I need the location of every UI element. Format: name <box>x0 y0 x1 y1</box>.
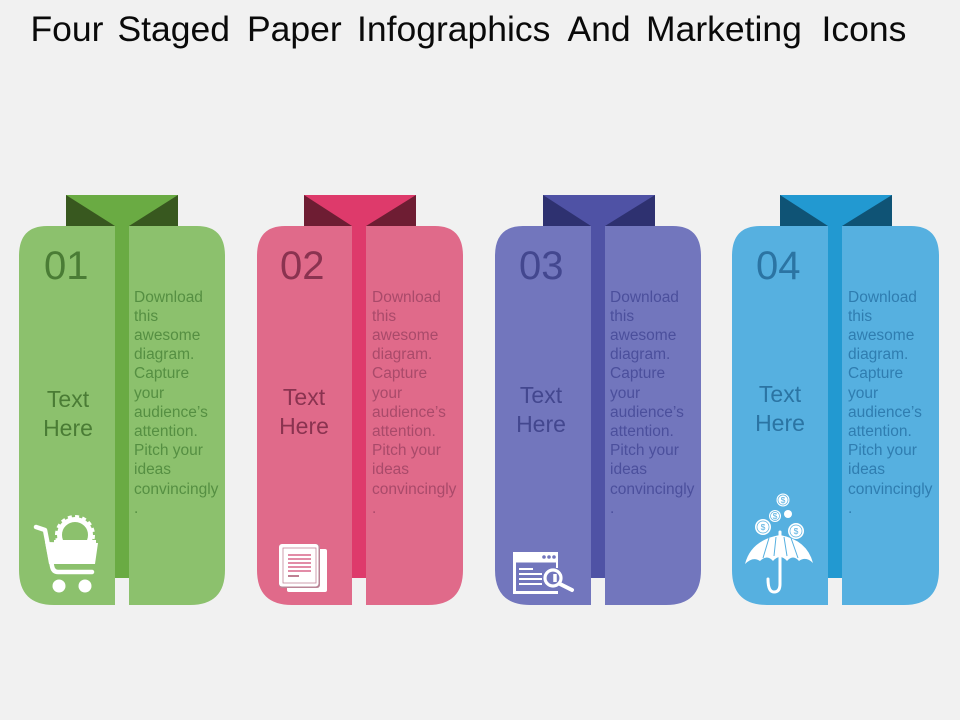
body text: Pitch your <box>134 442 203 459</box>
body text <box>134 289 219 517</box>
body text: Download <box>134 289 203 306</box>
title: And <box>568 9 631 49</box>
body text: diagram. <box>134 346 194 363</box>
heading: Text <box>759 381 802 407</box>
icon: shopping cart with gear <box>36 516 98 592</box>
body text: convincingly <box>848 481 933 498</box>
body text: diagram. <box>372 346 432 363</box>
heading: Text <box>520 382 563 408</box>
body text: . <box>610 500 614 517</box>
title: Infographics <box>357 9 550 49</box>
panel: stage 04 blue <box>732 195 939 605</box>
panel: stage 01 green <box>19 195 225 605</box>
top tab <box>66 195 178 226</box>
body text: . <box>134 500 138 517</box>
centre fold <box>352 226 366 578</box>
body text: audience’s <box>372 404 446 421</box>
body text: audience’s <box>134 404 208 421</box>
heading: Text <box>283 384 326 410</box>
icon: paper documents <box>279 544 327 592</box>
title: Paper <box>247 9 342 49</box>
body text: ideas <box>372 461 409 478</box>
top tab <box>543 195 655 226</box>
body text: convincingly <box>372 481 457 498</box>
heading: Text <box>47 386 90 412</box>
body text: . <box>848 500 852 517</box>
card body <box>732 226 939 605</box>
body text: attention. <box>372 423 436 440</box>
body text: your <box>372 385 402 402</box>
body text: ideas <box>848 461 885 478</box>
icon: umbrella with coins: $ <box>773 511 778 521</box>
title: Marketing <box>646 9 802 49</box>
heading: Here <box>43 415 93 441</box>
body text: your <box>134 385 164 402</box>
heading <box>516 382 566 437</box>
icon: umbrella with coins: $ <box>781 495 786 505</box>
body text: Capture <box>372 365 427 382</box>
body text: convincingly <box>134 481 219 498</box>
panel: stage 02 pink <box>257 195 463 605</box>
body text: Pitch your <box>372 442 441 459</box>
body text: diagram. <box>610 346 670 363</box>
body text: awesome <box>134 327 200 344</box>
body text: this <box>610 308 634 325</box>
top tab <box>780 195 892 226</box>
body text: attention. <box>848 423 912 440</box>
heading: Here <box>516 411 566 437</box>
number: 03 <box>519 244 564 288</box>
body text <box>610 289 695 517</box>
body text: awesome <box>372 327 438 344</box>
body text: audience’s <box>848 404 922 421</box>
icon: umbrella with coins: $ <box>794 526 799 536</box>
heading <box>43 386 93 441</box>
icon: browser window with magnifier <box>513 552 572 594</box>
number: 01 <box>44 244 88 288</box>
body text: awesome <box>610 327 676 344</box>
body text: your <box>848 385 878 402</box>
body text: Download <box>848 289 917 306</box>
body text: convincingly <box>610 481 695 498</box>
heading <box>755 381 805 436</box>
body text: Capture <box>610 365 665 382</box>
body text: this <box>848 308 872 325</box>
title <box>30 9 906 49</box>
icon: umbrella with coins: $ <box>761 522 766 532</box>
body text: attention. <box>134 423 198 440</box>
body text <box>848 289 933 517</box>
icon: umbrella with coins <box>745 494 813 592</box>
body text: attention. <box>610 423 674 440</box>
panel: stage 03 purple <box>495 195 701 605</box>
heading <box>279 384 329 439</box>
top tab <box>304 195 416 226</box>
body text: ideas <box>610 461 647 478</box>
title: Staged <box>118 9 230 49</box>
body text: Capture <box>134 365 189 382</box>
body text: Pitch your <box>610 442 679 459</box>
body text: Capture <box>848 365 903 382</box>
title: Icons <box>822 9 906 49</box>
heading: Here <box>279 413 329 439</box>
body text: audience’s <box>610 404 684 421</box>
card body <box>495 226 701 605</box>
body text: Download <box>610 289 679 306</box>
centre fold <box>591 226 605 578</box>
body text: ideas <box>134 461 171 478</box>
number: 04 <box>756 244 800 288</box>
card body <box>19 226 225 605</box>
body text: . <box>372 500 376 517</box>
centre fold <box>828 226 842 578</box>
body text: Pitch your <box>848 442 917 459</box>
centre fold <box>115 226 129 578</box>
body text: awesome <box>848 327 914 344</box>
number: 02 <box>280 244 324 288</box>
body text: this <box>372 308 396 325</box>
card body <box>257 226 463 605</box>
body text: Download <box>372 289 441 306</box>
body text: this <box>134 308 158 325</box>
body text: your <box>610 385 640 402</box>
title: Four <box>30 9 104 49</box>
body text: diagram. <box>848 346 908 363</box>
body text <box>372 289 457 517</box>
heading: Here <box>755 410 805 436</box>
